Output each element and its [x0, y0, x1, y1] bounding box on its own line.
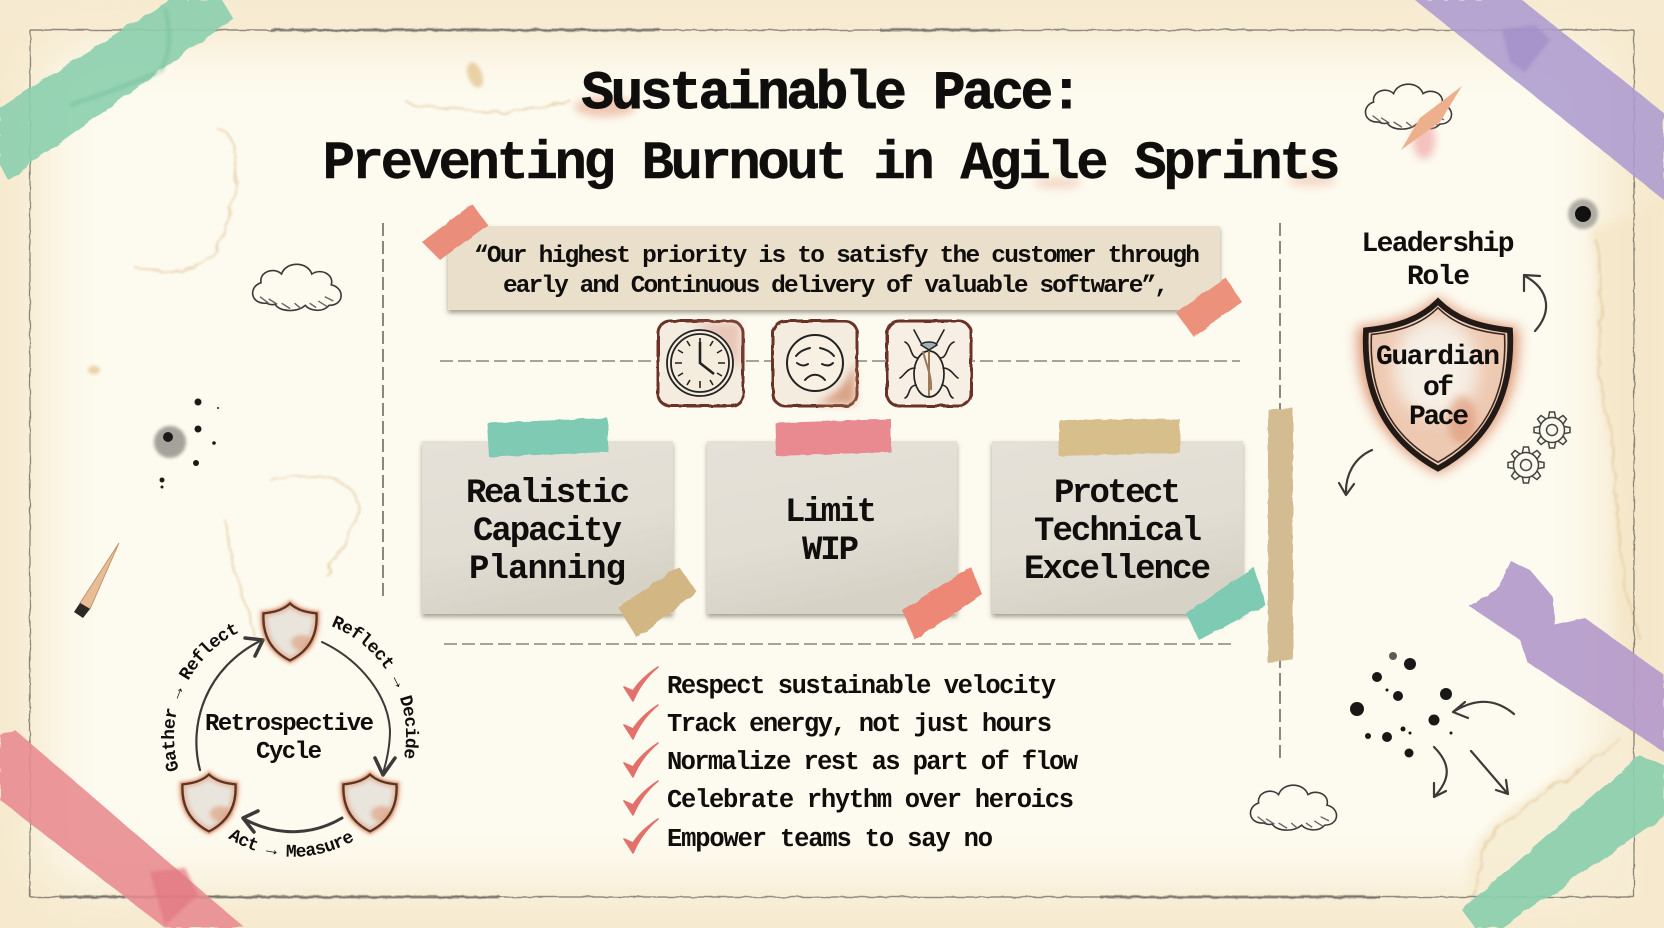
checklist: Empower teams to say no: [667, 825, 993, 854]
washi tape: purple bottom-right: [1469, 561, 1664, 752]
quote banner: early and Continuous delivery of valuable software”,: [503, 273, 1169, 300]
panel: Protect Technical Excellence: [992, 441, 1243, 614]
pencil-pink smudges behind title: [575, 97, 1336, 189]
tan vertical tape: [1268, 408, 1293, 663]
small tan spots: [88, 60, 486, 374]
panel: Realistic Capacity Planning: Realistic: [466, 475, 630, 513]
panel: Limit WIP: [707, 441, 957, 614]
guardian shield: Guardian: [1376, 342, 1500, 373]
pink smudge and pencil sliver top right: [1401, 86, 1462, 159]
leadership role heading: Leadership: [1362, 229, 1514, 260]
checklist: Celebrate rhythm over heroics: [667, 786, 1074, 815]
retrospective cycle: Act → Measure: [228, 830, 353, 857]
icon: cloud top right: [1365, 84, 1452, 129]
icon: pencil stub: [74, 543, 119, 618]
checklist: Normalize rest as part of flow: [667, 748, 1079, 777]
panel: Protect Technical Excellence: Excellence: [1024, 551, 1211, 589]
washi tape: green bottom-right: [1462, 755, 1664, 928]
leadership role heading: Role: [1407, 262, 1470, 293]
guardian shield: [1358, 297, 1518, 473]
card tape: tan top: [1059, 419, 1180, 456]
ink splatter bottom right: [1350, 652, 1452, 758]
quote banner: “Our highest priority is to satisfy the customer through: [474, 243, 1200, 270]
guardian shield: of: [1423, 373, 1454, 404]
leadership role heading: [1362, 229, 1514, 293]
icon: gears: [1508, 412, 1570, 483]
card tape: pink top: [775, 419, 891, 456]
quote tape left: [422, 204, 488, 260]
retrospective cycle: Retrospective: [205, 711, 374, 738]
quote tape right: [1176, 278, 1242, 337]
ink blot left: [154, 398, 219, 488]
card tape: teal corner: [1186, 567, 1266, 640]
water stains: [135, 100, 1640, 900]
washi tape: pink bottom-left: [0, 730, 245, 928]
title: Sustainable Pace:: [582, 64, 1082, 125]
card tape: teal top: [487, 418, 608, 457]
washi tape: purple top-right: [1415, 0, 1664, 200]
arrow: up: [1524, 275, 1546, 331]
panel: Realistic Capacity Planning: Planning: [469, 551, 626, 589]
panel: Protect Technical Excellence: Technical: [1034, 513, 1202, 551]
panel: Protect Technical Excellence: Protect: [1054, 475, 1181, 513]
checklist: Track energy, not just hours: [667, 710, 1052, 739]
panel: Limit WIP: Limit: [785, 494, 877, 532]
quote banner: [448, 226, 1220, 310]
icon: beetle stamp: [887, 321, 971, 406]
retrospective cycle: Cycle: [256, 739, 322, 766]
panel: Limit WIP: WIP: [802, 532, 859, 570]
arrows around splatter: [1434, 702, 1514, 797]
ink blot top right: [1568, 199, 1598, 229]
retrospective cycle: [160, 598, 450, 857]
icon: cloud left: [253, 264, 341, 311]
checklist: Respect sustainable velocity: [667, 672, 1056, 701]
checklist: [624, 667, 1079, 854]
panel: Realistic Capacity Planning: [422, 441, 673, 614]
title: [323, 64, 1341, 195]
icon: clock stamp: [658, 321, 743, 406]
icon: tired face stamp: [773, 321, 857, 406]
dashed row rules: [440, 361, 1240, 644]
guardian shield: Pace: [1409, 402, 1469, 433]
washi tape: green top-left: [0, 0, 233, 180]
retrospective cycle: Gather → Reflect: [160, 624, 238, 772]
arrow: down: [1339, 450, 1372, 495]
card tape: coral corner: [902, 567, 982, 640]
retrospective cycle: Reflect → Decide: [332, 616, 420, 758]
panel: Realistic Capacity Planning: Capacity: [473, 513, 622, 551]
dashed column dividers: [383, 223, 1280, 759]
card tape: tan corner: [618, 567, 697, 638]
title: Preventing Burnout in Agile Sprints: [323, 134, 1341, 195]
icon: cloud bottom right: [1250, 785, 1337, 830]
